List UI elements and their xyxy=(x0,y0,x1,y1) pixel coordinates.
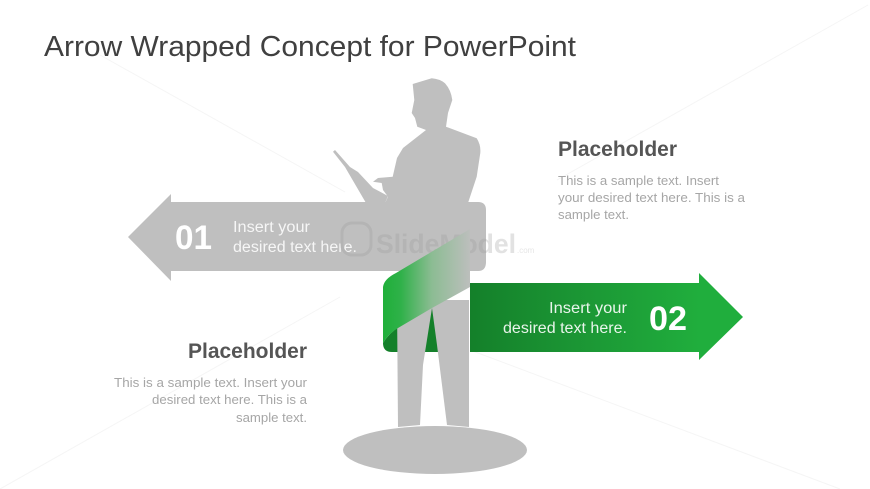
placeholder heading left: Placeholder xyxy=(188,340,307,363)
body text left: sample text. xyxy=(236,410,307,425)
pedestal xyxy=(343,426,527,474)
number 02: 02 xyxy=(649,300,687,338)
legs xyxy=(397,300,469,427)
title: Arrow Wrapped Concept for PowerPoint xyxy=(44,31,576,63)
green ribbon xyxy=(383,229,470,343)
body text right: This is a sample text. Insert xyxy=(558,173,719,188)
watermark: SlideModel xyxy=(376,229,516,259)
watermark: .com xyxy=(517,246,535,255)
person silhouette xyxy=(333,78,527,474)
body text right: your desired text here. This is a xyxy=(558,190,746,205)
body text right xyxy=(558,173,746,222)
number 01: 01 xyxy=(175,219,212,257)
watermark outer part: SlideModel xyxy=(376,229,516,259)
body text left xyxy=(114,375,308,425)
grey arrow 01: desired text here. xyxy=(233,239,357,256)
ribbon inner dark fold xyxy=(383,300,445,352)
arrow label 02: Insert your xyxy=(549,300,627,317)
green arrow 02: desired text here. xyxy=(503,320,627,337)
body text left: This is a sample text. Insert your xyxy=(114,375,308,390)
placeholder heading right: Placeholder xyxy=(558,138,677,161)
tablet xyxy=(333,150,388,203)
body text left: desired text here. This is a xyxy=(152,392,308,407)
body text right: sample text. xyxy=(558,207,629,222)
grey arrow 01 xyxy=(128,194,486,281)
watermark xyxy=(342,223,535,259)
green arrow 02 xyxy=(383,273,743,360)
arrow label 01: Insert your xyxy=(233,219,310,236)
